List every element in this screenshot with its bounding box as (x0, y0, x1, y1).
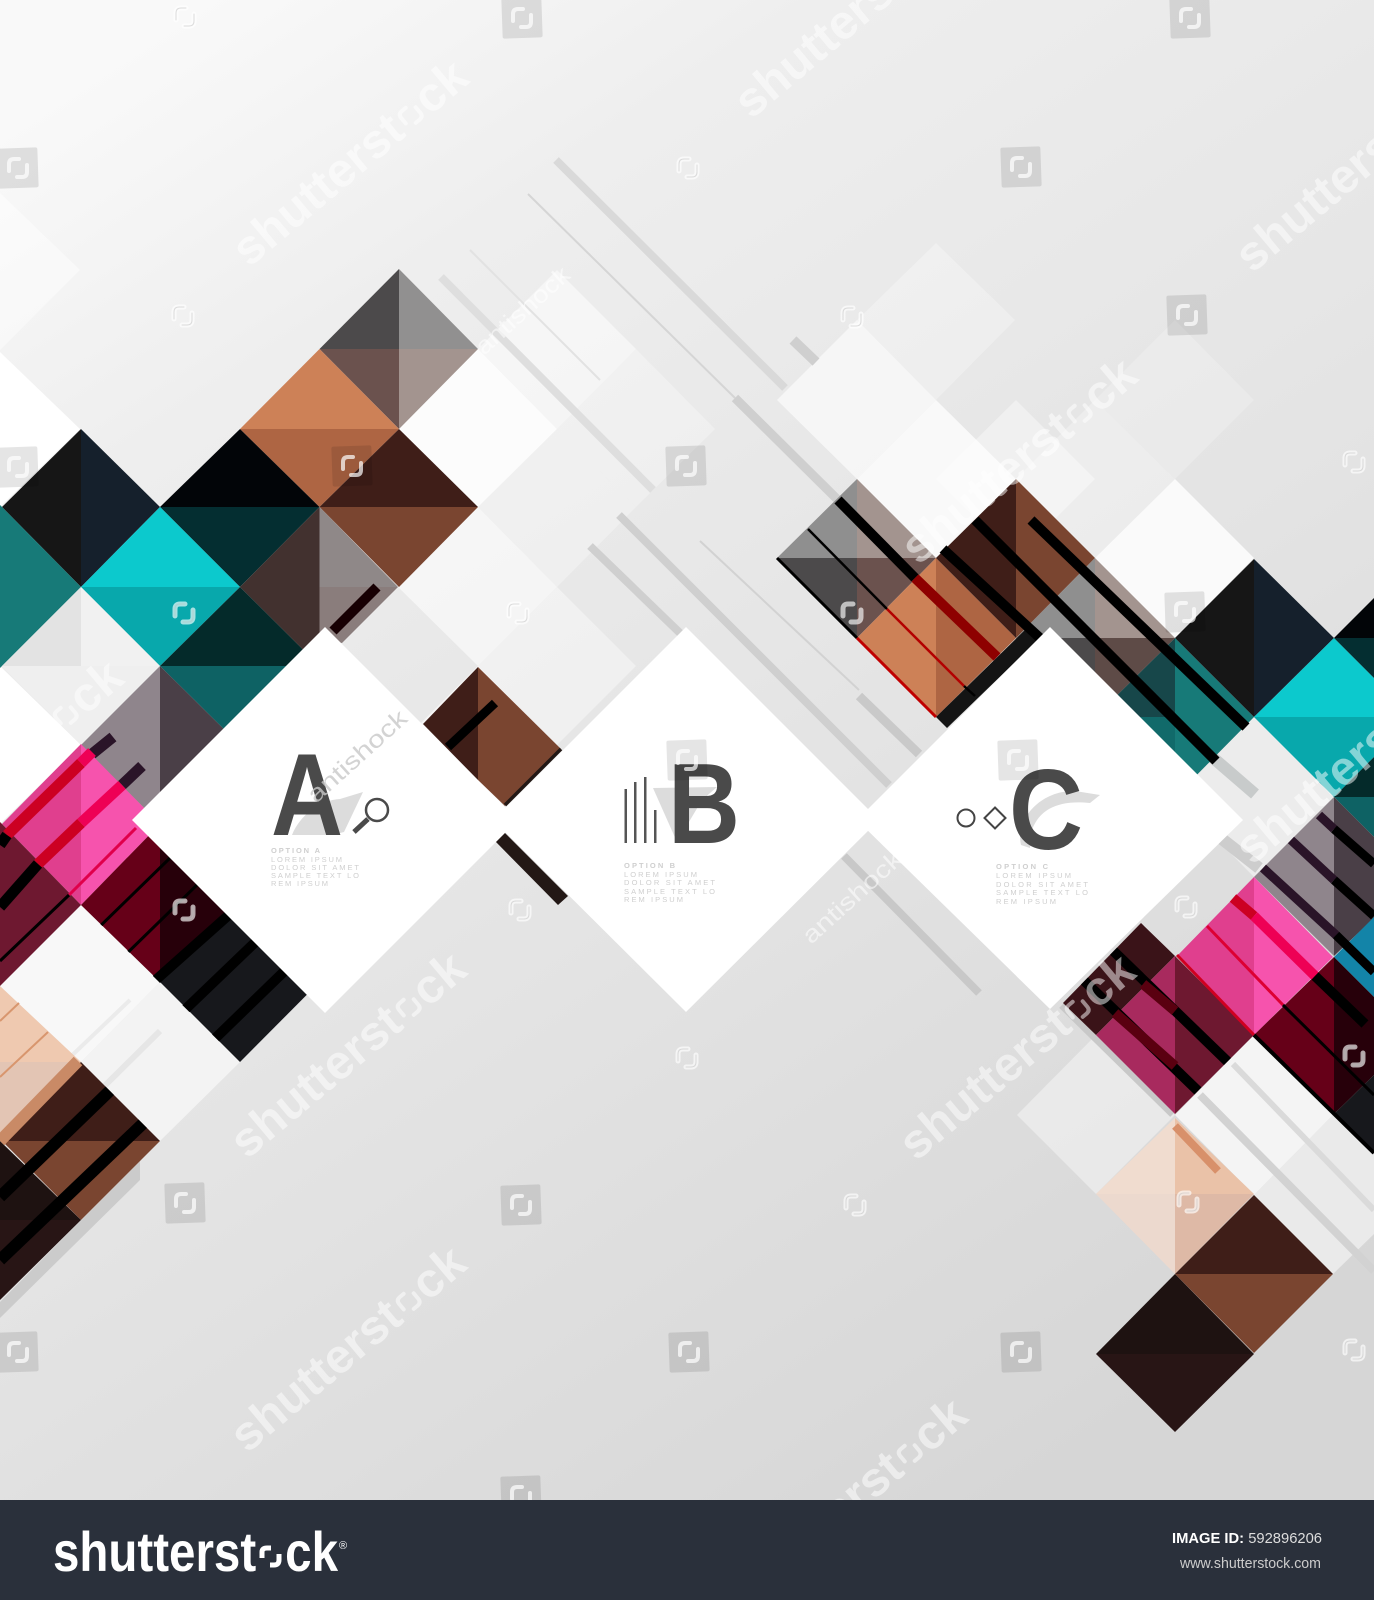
registered mark: ® (339, 1540, 347, 1552)
option B text: REM IPSUM (624, 895, 683, 904)
antishock watermarks (302, 261, 909, 949)
tile: blue edge (1334, 917, 1374, 997)
option A text: OPTION A (271, 846, 321, 855)
tile: navy dark (1175, 559, 1334, 717)
icon: magnifier (354, 799, 388, 832)
option A text: REM IPSUM (271, 879, 328, 888)
tile: maroon dark corner (1063, 923, 1175, 1035)
tile: bright cyan (1254, 638, 1374, 797)
footer logo: shutterstock (53, 1520, 339, 1583)
option B text: SAMPLE TEXT LO (624, 887, 715, 896)
tile: deep teal (160, 587, 320, 745)
footer bar (0, 1500, 1374, 1600)
tile: grey (777, 479, 936, 638)
image id: IMAGE ID: 592896206 (1172, 1530, 1322, 1547)
tile: bright cyan (81, 507, 240, 666)
option A text: SAMPLE TEXT LO (271, 871, 359, 880)
option A block (271, 729, 388, 888)
left tile cluster (0, 269, 478, 1300)
shadow mark behind B (653, 787, 717, 842)
white option card A (132, 627, 518, 1013)
tile: lower brown (2, 1062, 160, 1220)
white option card C (857, 627, 1243, 1009)
option B text: DOLOR SIT AMET (624, 878, 715, 887)
letter C: C (1009, 747, 1083, 874)
tile: grey centre (1016, 558, 1175, 717)
tile: black top right (1334, 598, 1374, 678)
tile: black (160, 903, 320, 1062)
antishock watermarks: antishock (470, 261, 577, 360)
antishock watermarks: antishock (797, 845, 909, 949)
tile: peach (0, 986, 81, 1141)
letter B: B (668, 741, 740, 868)
option C text: REM IPSUM (996, 897, 1056, 906)
tile: dark navy (2, 429, 160, 587)
tile: dark grey brown (240, 507, 398, 666)
footer logo glyph (262, 1548, 279, 1565)
tile: teal left (0, 505, 81, 668)
option B text: OPTION B (624, 861, 676, 870)
antishock watermarks: antishock (302, 704, 414, 808)
tile: black edge (1334, 1075, 1374, 1152)
tile: purple grey (1254, 797, 1374, 956)
tile: magenta (1177, 877, 1333, 1035)
option B text (624, 861, 715, 904)
option C text: DOLOR SIT AMET (996, 880, 1088, 889)
icon: circle and diamond (958, 808, 1006, 828)
tile: pale grey (2, 587, 160, 745)
tile: purple grey (81, 666, 240, 824)
website: www.shutterstock.com (1179, 1556, 1321, 1572)
tile: black and dark teal (160, 429, 320, 587)
letter A: A (271, 729, 343, 860)
tile: peach (1096, 1118, 1254, 1274)
tile: deep teal edge (1334, 757, 1374, 837)
option B text: LOREM IPSUM (624, 870, 697, 879)
option B block (624, 741, 740, 904)
option C text (996, 862, 1088, 906)
tile: crimson (1254, 957, 1374, 1114)
option A text (271, 846, 359, 888)
option A text: LOREM IPSUM (271, 855, 342, 864)
small brown tile with stripe (423, 667, 561, 806)
left stripes (0, 587, 377, 1260)
tile: brown lower (1175, 1195, 1333, 1353)
option C text: LOREM IPSUM (996, 871, 1071, 880)
tile: brown (936, 479, 1095, 638)
tile: grey top (320, 269, 478, 429)
dark diagonal bar (496, 833, 568, 905)
option C text: SAMPLE TEXT LO (996, 888, 1088, 897)
shadow mark behind C (1020, 791, 1100, 848)
right tile cluster (777, 479, 1374, 1432)
option C block (958, 747, 1100, 906)
tile: magenta (2, 744, 160, 905)
shadow mark behind A (292, 792, 363, 835)
tile: dark lower (1096, 1274, 1254, 1432)
tile: crimson (81, 824, 240, 982)
icon: bars (624, 777, 656, 843)
right stripes (777, 500, 1374, 1171)
pale translucent background diamonds (0, 193, 1374, 1274)
option C text: OPTION C (996, 862, 1049, 871)
tile: dark teal (1095, 638, 1254, 797)
white option card B (493, 627, 879, 1012)
tile: orange (857, 558, 1016, 717)
tile: lower dark (0, 1141, 81, 1300)
tile: raspberry (1096, 956, 1254, 1114)
tile: maroon left (0, 822, 81, 986)
option A text: DOLOR SIT AMET (271, 863, 359, 872)
light gray diagonal stripes (0, 160, 1374, 1318)
tile: orange (240, 349, 399, 507)
tile: brown (320, 429, 478, 587)
